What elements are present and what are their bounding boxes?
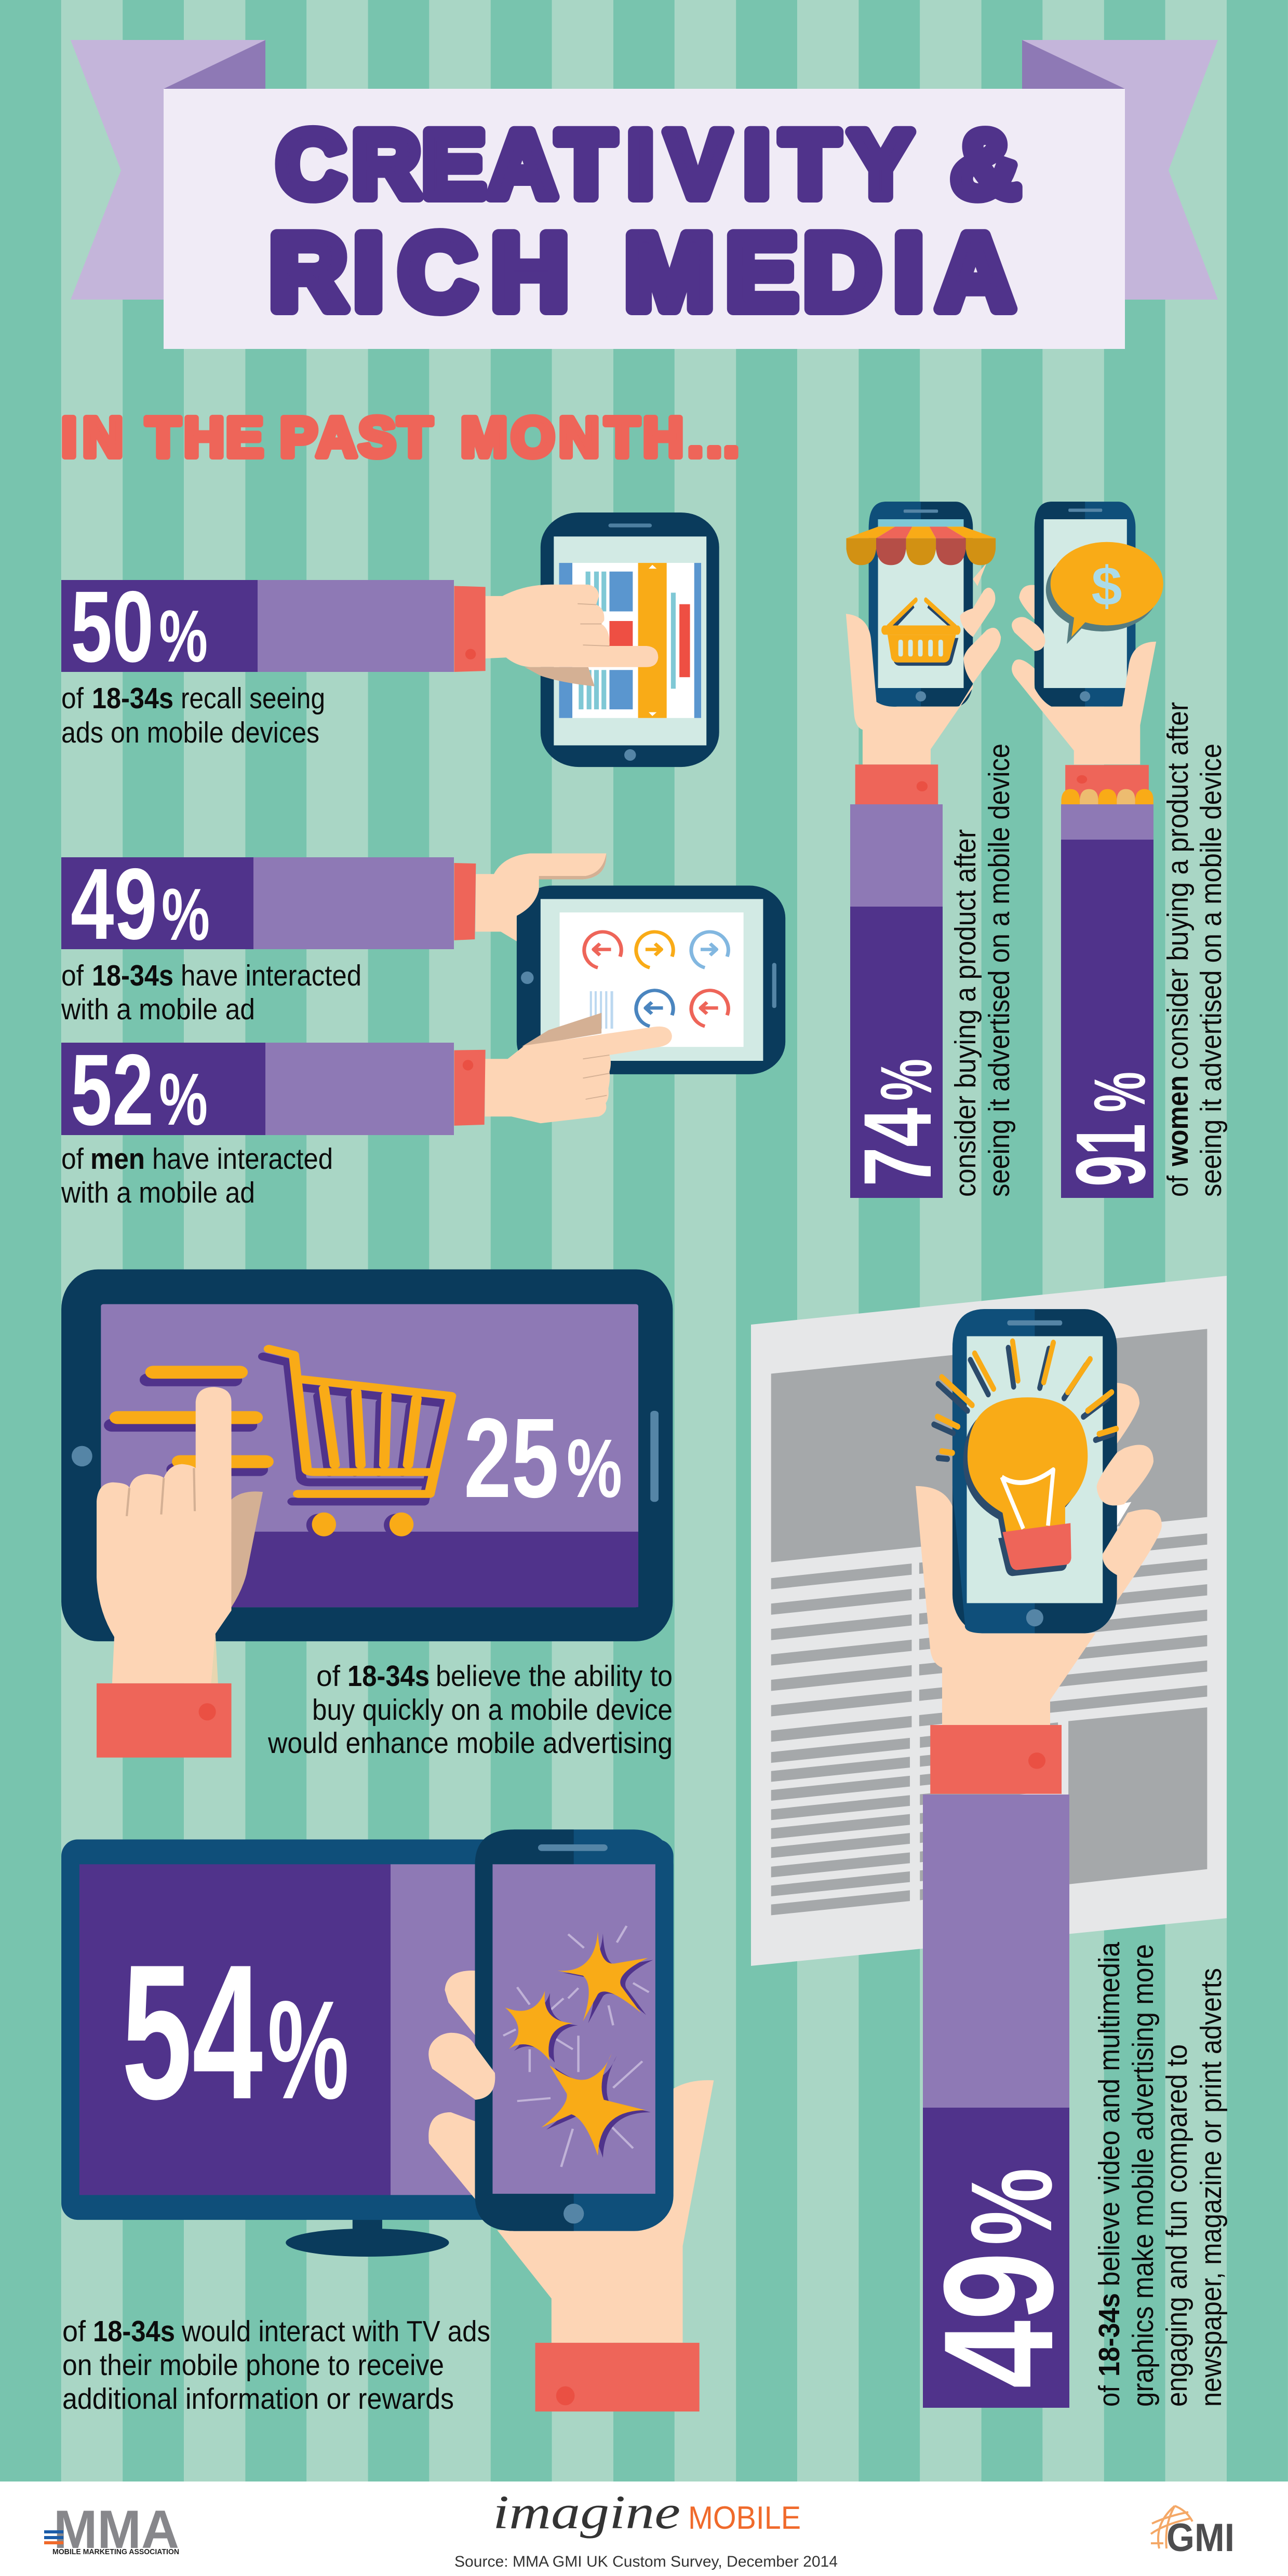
caption: of [1161,1176,1195,1197]
logo: MMA: MMA [53,2500,179,2560]
caption: of [1093,2385,1126,2407]
logo: imagine mobile [493,2486,801,2539]
stat bar: 74% [844,907,951,1198]
caption: ads on mobile devices [61,716,319,749]
ribbon: left fold [164,40,265,89]
title text: RICH MEDIA [270,212,1014,332]
caption: seeing it advertised on a mobile device [1195,744,1228,1197]
stat: 54%: 54 [122,1925,264,2139]
caption [267,1660,673,1760]
icon: television [61,1839,674,2257]
panel: 49% video and multimedia [751,1276,1228,2408]
caption: engaging and fun compared to [1160,2044,1193,2407]
stat bar: 74%: % [865,1059,947,1101]
icon: phone with stars [475,1829,674,2231]
heading: in the past month: IN THE PAST MONTH... [61,406,739,468]
icon: cuff [930,1725,1062,1794]
caption [62,2315,490,2416]
icon: phone with shop awning and basket [846,502,996,707]
caption: consider buying a product after [949,829,982,1197]
icon: upper pointing hand [454,854,606,941]
caption: of [61,682,84,715]
stat bar: 91%: 91 [1056,1124,1166,1186]
stat bar: 52%: % [159,1058,208,1141]
stat bar: 49%: 49 [71,847,157,961]
caption: men interacted: of [61,1142,84,1176]
caption: would enhance mobile advertising [267,1727,673,1760]
stat bar: 49%: % [947,2168,1076,2245]
caption: additional information or rewards [62,2382,454,2416]
sleeve bar [850,804,943,907]
icon: hand fingers behind phone [916,1383,1139,1725]
caption: believe video and multimedia [1093,1942,1126,2286]
caption: 18-34s [1093,2293,1126,2377]
caption: buy quickly on a mobile device [312,1693,673,1727]
logo: GMI [1151,2506,1235,2560]
stat bar: 52%: 52 [71,1033,154,1147]
caption: 18-34s interacted: of [61,959,84,992]
caption: 18-34s interacted: 18-34s [92,959,173,992]
icon: phone with dollar speech bubble [1035,502,1163,707]
caption: of [316,1660,340,1693]
stat: 25%: 25 [464,1395,559,1521]
panel: 50% recall seeing ads [61,512,719,767]
stat bar: 50%: % [159,595,208,678]
stat bar: 50%: 50 [71,570,154,683]
source line: Source: MMA GMI UK Custom Survey, December 2014 [454,2553,838,2570]
icon: phone with ad [541,512,719,767]
caption: newspaper, magazine or print adverts [1195,1968,1228,2407]
caption: graphics make mobile advertising more [1126,1944,1160,2407]
title banner [71,40,1218,349]
icon: pointing hand [454,585,658,686]
caption: would interact with TV ads [181,2315,490,2348]
icon: phone with light bulb [934,1309,1117,1633]
caption: on their mobile phone to receive [62,2349,444,2382]
caption: 18-34s [347,1660,430,1693]
sleeve bar [1061,804,1153,840]
logo: imagine mobile: MOBILE [688,2500,801,2536]
icon: front finger [428,2033,495,2100]
logo: MMA: MOBILE MARKETING ASSOCIATION [52,2547,179,2556]
icon: tablet with cart [61,1270,673,1641]
stat bar: 49% [61,847,253,961]
caption [1161,702,1228,1197]
caption [1093,1942,1228,2407]
caption: of [62,2315,86,2348]
icon: hand holding phone [846,588,1001,804]
icon: tablet with arrows [517,885,785,1074]
caption: 18-34s interacted [61,959,361,1026]
icon: front fingers [1097,1445,1162,1601]
caption: consider buying a product after [1161,702,1195,1070]
logo: imagine mobile: imagine [493,2486,680,2539]
caption: 18-34s [92,682,173,715]
caption: recall seeing [181,682,325,715]
stat bar: 49%: % [162,873,210,956]
icon: back fingers and palm [428,1971,714,2411]
caption: men interacted: have interacted [152,1142,333,1176]
stat bar: 91%: % [1079,1072,1160,1112]
panel: 74% consider buying [844,502,1016,1198]
sleeve bar [61,857,454,949]
stat bar: 49%: 49 [911,2252,1085,2389]
icon: lower pointing hand [454,1013,672,1126]
panel: 25% buy quickly [61,1270,673,1760]
logo: GMI: GMI [1166,2516,1235,2560]
caption: seeing it advertised on a mobile device [983,744,1016,1197]
icon: hand holding phone [1012,585,1156,804]
stat bar: 49% [911,2108,1085,2408]
stat: 54%: % [267,1972,349,2128]
title text: CREATIVITY & [277,111,1019,217]
icon: pointing hand with cuff [97,1387,263,1758]
stat bar: 74%: 74 [844,1108,951,1186]
icon: dollar sign: $ [1092,556,1122,617]
sleeve bar [61,1043,454,1135]
stat bar: 50% [61,570,258,683]
caption: 18-34s interacted: have interacted [181,959,361,992]
footer [44,2486,1235,2570]
panel: 91% of women consider buying [1012,502,1228,1198]
banner panel [164,89,1125,349]
stat: 25%: % [567,1422,622,1515]
ribbon: right tail [1022,40,1218,300]
stat bar: 91% [1056,840,1166,1198]
caption: women [1161,1075,1195,1167]
caption: men interacted: men [90,1142,145,1176]
panel: 54% interact with TV ads [61,1829,714,2416]
caption [949,744,1016,1197]
title text [270,111,1019,332]
stat bar: 52% [61,1033,265,1147]
caption: 18-34s interacted: with a mobile ad [61,993,255,1026]
caption [61,682,325,749]
caption: men interacted: with a mobile ad [61,1176,255,1209]
ribbon: right fold [1022,40,1125,89]
caption: 18-34s [93,2315,175,2348]
panel: tablet interaction 49% and 52% [61,847,785,1209]
sleeve bar [923,1795,1069,2108]
newspaper [751,1276,1227,1966]
caption: believe the ability to [436,1660,673,1693]
caption: men interacted [61,1142,333,1209]
sleeve bar [61,580,454,672]
ribbon: left tail [71,40,265,300]
